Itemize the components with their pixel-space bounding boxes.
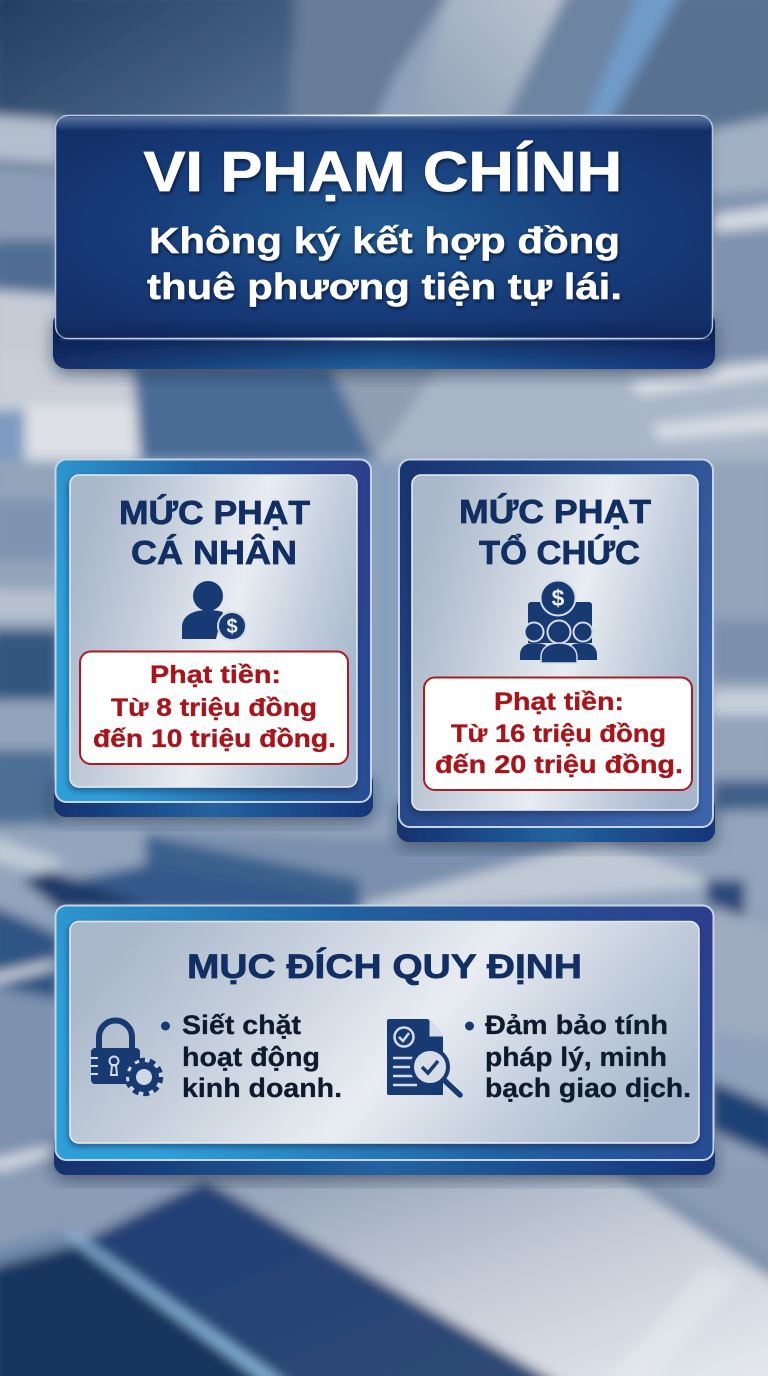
card metal face xyxy=(412,475,698,810)
penalty amount box: Phạt tiền: xyxy=(494,688,624,716)
icon: document with magnifier xyxy=(387,1019,460,1095)
penalty amount box: đến 20 triệu đồng. xyxy=(435,751,683,779)
bullet and text: legality and transparency: pháp lý, minh xyxy=(485,1042,667,1072)
bullet and text: tighten business xyxy=(161,1010,342,1103)
panel: regulation purpose xyxy=(54,906,715,1175)
card frame xyxy=(56,460,371,802)
bullet and text: tighten business: hoạt động xyxy=(182,1042,320,1072)
card heading: TỔ CHỨC xyxy=(479,534,640,571)
bullet and text: legality and transparency: bạch giao dịch. xyxy=(485,1073,691,1103)
bullet and text: legality and transparency xyxy=(465,1010,691,1103)
icon: group with dollar coin: $ xyxy=(552,585,565,611)
purpose heading: MỤC ĐÍCH QUY ĐỊNH xyxy=(187,948,582,986)
card metal face xyxy=(70,475,357,787)
card heading xyxy=(459,493,651,571)
card metal face xyxy=(70,922,699,1143)
penalty amount box: Phạt tiền: xyxy=(150,661,281,689)
card heading: CÁ NHÂN xyxy=(131,534,297,571)
icon: person with dollar coin xyxy=(182,581,246,640)
card heading: MỨC PHẠT xyxy=(459,493,651,530)
panel: individual penalty xyxy=(54,460,373,817)
card base xyxy=(54,1130,715,1175)
header face xyxy=(56,116,712,338)
penalty amount box: đến 10 triệu đồng. xyxy=(93,725,336,753)
panel: organization penalty xyxy=(397,460,715,842)
icon: person with dollar coin: $ xyxy=(226,616,238,638)
card heading: MỨC PHẠT xyxy=(119,494,310,531)
card base xyxy=(54,770,373,817)
penalty amount box xyxy=(80,652,348,764)
card heading xyxy=(119,494,310,571)
penalty amount box: Từ 8 triệu đồng xyxy=(111,694,317,722)
bullet and text: tighten business: kinh doanh. xyxy=(182,1073,342,1103)
icon: padlock with gear xyxy=(91,1021,162,1095)
card base xyxy=(397,795,715,842)
penalty amount box: Từ 16 triệu đồng xyxy=(451,720,666,748)
card frame xyxy=(399,460,713,827)
subtitle: thuê phương tiện tự lái. xyxy=(147,266,622,307)
card frame xyxy=(56,906,714,1160)
bullet and text: legality and transparency: Đảm bảo tính xyxy=(485,1010,668,1040)
subtitle: Không ký kết hợp đồng xyxy=(149,220,620,261)
penalty amount box xyxy=(424,678,692,790)
panel: header violation xyxy=(53,114,715,369)
title: VI PHẠM CHÍNH xyxy=(144,140,622,204)
icon: group with dollar coin xyxy=(520,580,597,663)
subtitle xyxy=(147,220,622,307)
bullet and text: tighten business: Siết chặt xyxy=(182,1010,301,1040)
header base ledge xyxy=(53,310,715,369)
